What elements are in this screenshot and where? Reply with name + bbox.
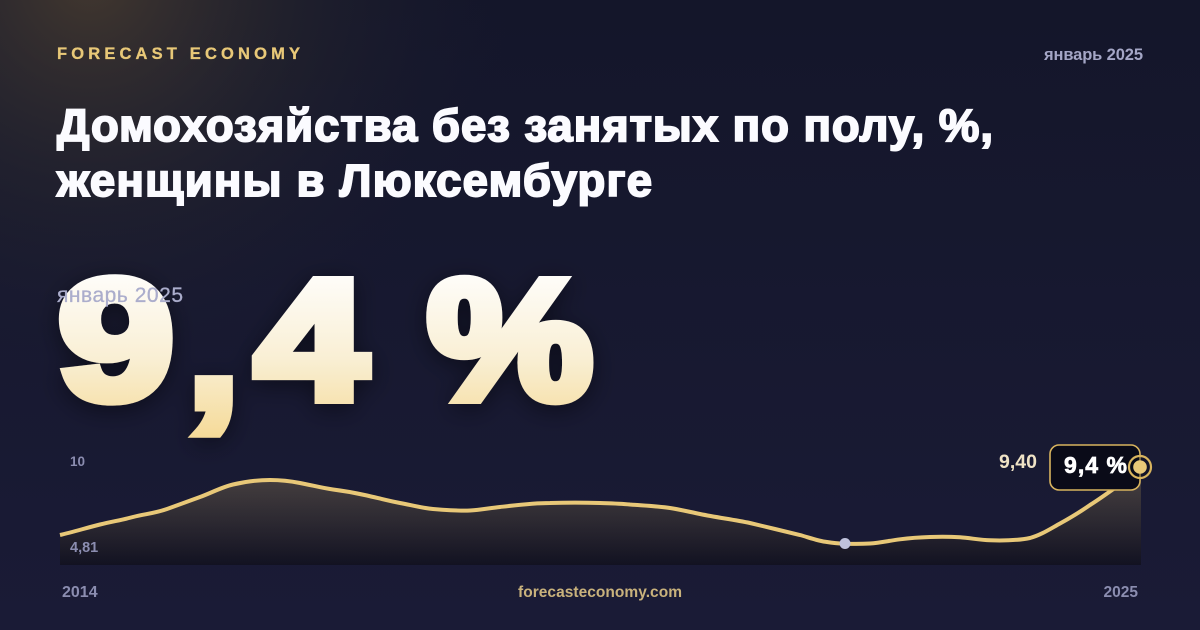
axis label: max: 10: [70, 454, 85, 469]
date overlay: январь 2025: [57, 284, 183, 307]
axis start year: 2014: [62, 584, 98, 601]
big value: ,: [188, 252, 239, 442]
chart: [60, 445, 1151, 565]
area under line: [60, 467, 1141, 565]
callout: [1050, 445, 1140, 490]
big value: 9: [58, 245, 174, 435]
big value: [58, 245, 592, 442]
brand label: FORECAST ECONOMY: [57, 45, 300, 63]
big value: %: [428, 245, 592, 435]
callout: 9,4 %: [1064, 452, 1127, 478]
axis label: min: 4,81: [70, 540, 98, 556]
date top right: январь 2025: [1043, 46, 1143, 64]
title: женщины в Люксембурге: [56, 155, 652, 206]
line: [60, 467, 1140, 544]
title: [56, 100, 993, 206]
current point marker: [1129, 456, 1151, 478]
big value: 4: [255, 246, 367, 435]
minimum marker: [840, 538, 850, 549]
value label: 9,40: [999, 451, 1037, 473]
title: Домохозяйства без занятых по полу, %,: [57, 100, 993, 151]
axis end year: 2025: [1104, 584, 1138, 601]
source: forecasteconomy.com: [518, 584, 682, 601]
